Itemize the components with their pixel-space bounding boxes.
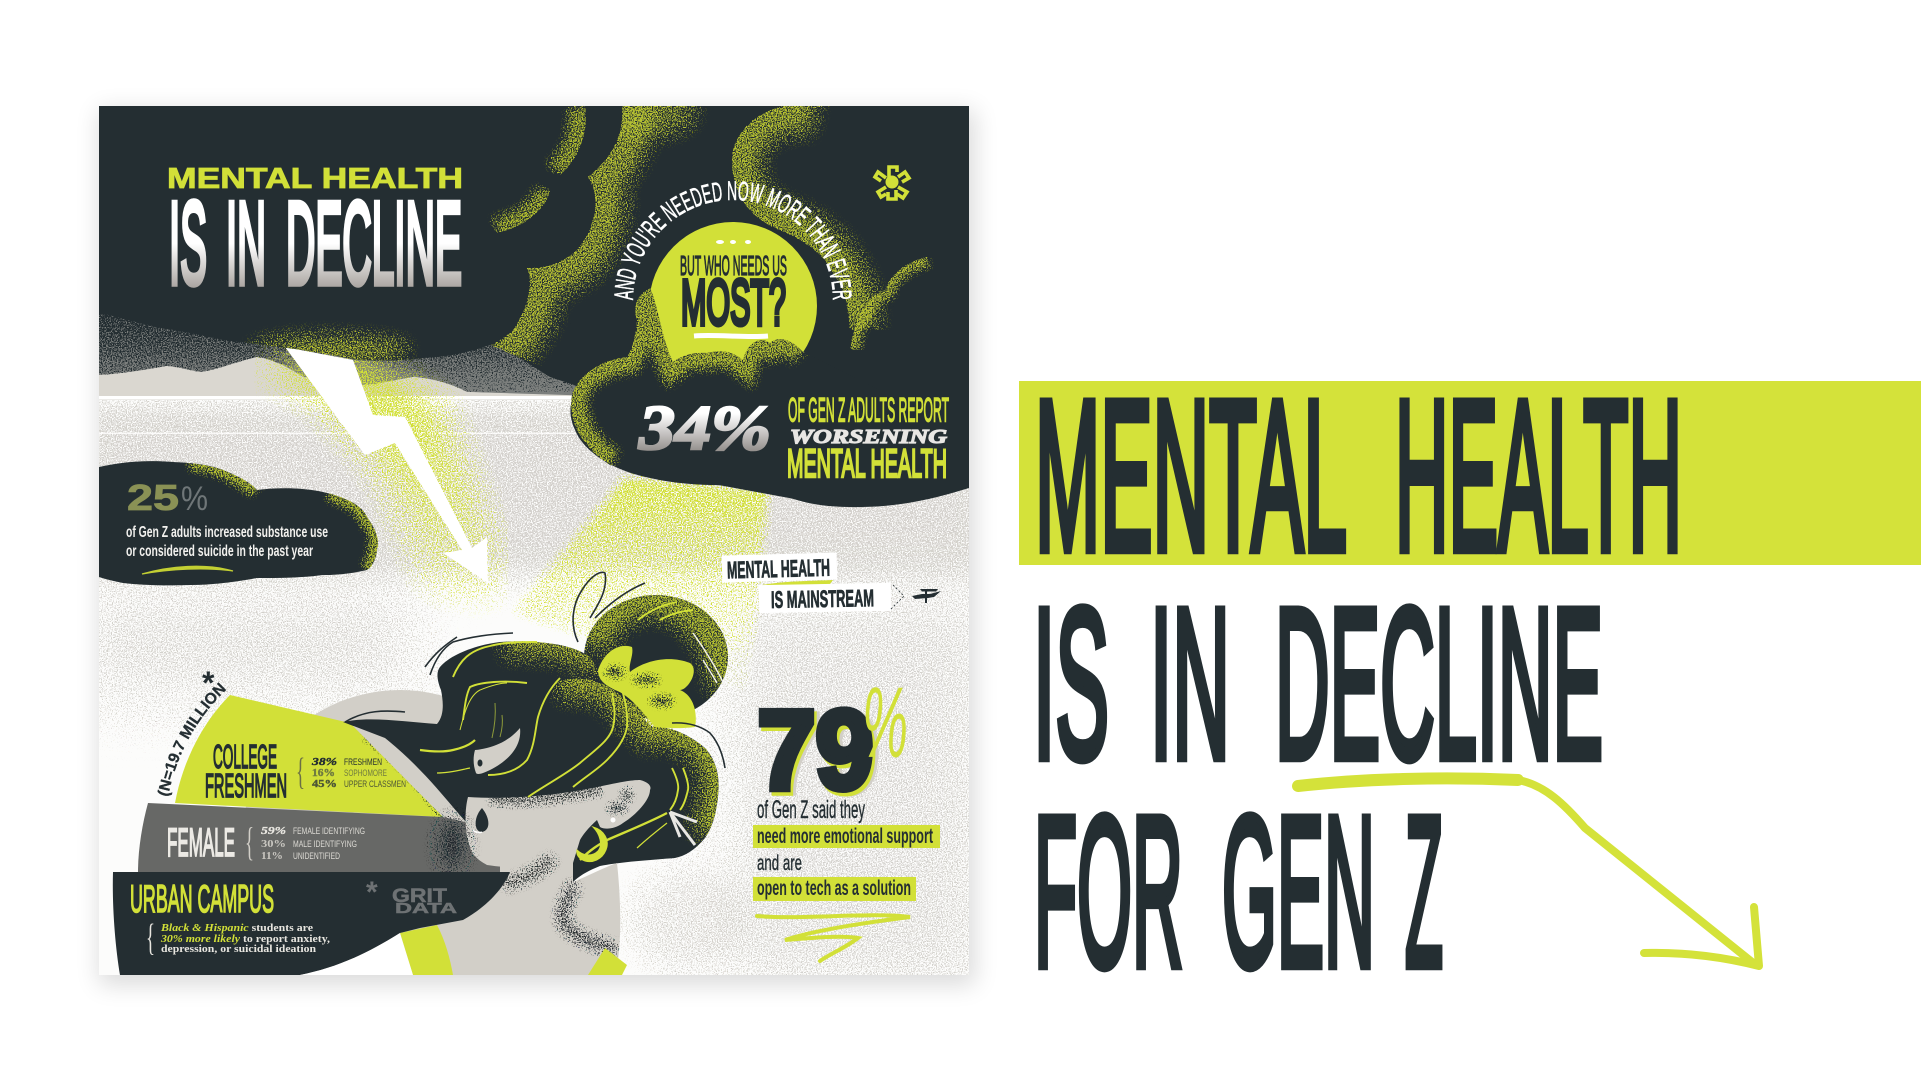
white arrow mark xyxy=(670,812,697,845)
banner line 1 xyxy=(722,553,837,585)
text 1: of Gen Z said they xyxy=(757,796,865,824)
caption line 2: or considered suicide in the past year xyxy=(126,543,313,560)
panel labels: female: MALE IDENTIFYING xyxy=(293,839,357,850)
sky grain background xyxy=(80,400,990,990)
highlight 1 xyxy=(753,825,940,848)
panel: infographic: DECLINE xyxy=(286,178,462,309)
beige backdrop circle xyxy=(240,690,560,1010)
grit data xyxy=(366,876,457,917)
figure yellow offset: 79 xyxy=(760,691,876,816)
urban campus band xyxy=(113,872,510,975)
hair strands xyxy=(420,602,693,860)
panel labels: college freshmen: COLLEGE xyxy=(213,738,277,775)
banner line 1: MENTAL HEALTH xyxy=(727,555,830,584)
panel: 25% cloud xyxy=(99,461,378,585)
storm cloud xyxy=(99,106,969,507)
beam of light xyxy=(514,478,768,690)
hair xyxy=(343,641,719,882)
body line 2: 30% more likely to report anxiety, xyxy=(160,934,331,945)
panel labels: college freshmen: FRESHMEN xyxy=(205,767,287,804)
clear area left of backdrop xyxy=(99,872,138,975)
stat: 79% xyxy=(753,667,940,961)
hair dissolving over wedge xyxy=(368,732,452,818)
segment: college freshmen wedge xyxy=(175,695,443,817)
lightning glow xyxy=(262,352,500,600)
body line 3: depression, or suicidal ideation xyxy=(161,944,317,955)
bow xyxy=(598,646,696,728)
white shoulder xyxy=(300,933,413,975)
heading line 2 xyxy=(1033,564,1603,804)
share 38%: 38% xyxy=(311,756,337,768)
panel: infographic xyxy=(99,106,969,975)
band below grey cloud xyxy=(99,357,600,400)
grey cloud grain xyxy=(99,313,576,392)
heading line 1: MENTAL xyxy=(1035,356,1347,596)
title line 2 xyxy=(172,198,462,288)
panel: infographic: BUT WHO NEEDS US xyxy=(680,250,787,281)
banner line 2: IS MAINSTREAM xyxy=(771,585,874,614)
panel labels: college freshmen xyxy=(205,738,406,804)
horizon band xyxy=(99,357,577,434)
text 2: and are xyxy=(757,852,802,875)
panel labels: college freshmen: { xyxy=(296,751,305,793)
share 30%: 30% xyxy=(261,838,286,850)
grit data: * xyxy=(366,876,378,909)
stat: 34% xyxy=(636,397,950,478)
figure 25%: 25 xyxy=(127,477,179,518)
share 59%: 59% xyxy=(261,825,286,837)
heading line 2: IN xyxy=(1150,564,1230,804)
panel labels: female: FEMALE IDENTIFYING xyxy=(293,826,365,837)
text: Z xyxy=(1405,772,1443,1012)
heading line 2: IS xyxy=(1033,564,1109,804)
heading band xyxy=(1019,381,1921,565)
panel labels: college freshmen: FRESHMEN xyxy=(344,757,382,768)
dots xyxy=(716,240,751,244)
highlight 2: open to tech as a solution xyxy=(757,877,911,900)
panel: urban campus: URBAN CAMPUS xyxy=(130,878,274,921)
banner underline xyxy=(762,580,833,589)
grit data: DATA xyxy=(395,900,457,917)
highlight 1: need more emotional support xyxy=(757,825,933,848)
title line 2: IN xyxy=(226,178,266,309)
panel shadow xyxy=(99,110,975,985)
icon: plane xyxy=(912,589,941,603)
tear xyxy=(473,808,488,833)
title line 2: IS xyxy=(169,178,207,309)
text: GEN xyxy=(1222,772,1375,1012)
banner line 2 xyxy=(759,583,891,614)
hand-drawn arrow xyxy=(1298,778,1759,966)
curved text: AND YOU'RE NEEDED NOW MORE THAN EVER xyxy=(614,181,852,300)
panel labels: female: FEMALE xyxy=(167,821,235,865)
straps xyxy=(400,925,627,975)
figure 34%: 34% xyxy=(638,392,771,463)
text: OF GEN Z ADULTS REPORT xyxy=(788,392,949,430)
circle: who needs us: MOST? xyxy=(681,266,786,338)
heading line 3: FOR xyxy=(1034,772,1183,1012)
front cloud rim light xyxy=(571,288,803,465)
stat: 34%: MENTAL HEALTH xyxy=(787,442,947,486)
share 11%: 11% xyxy=(261,850,283,862)
body line 1: Black & Hispanic students are xyxy=(160,923,314,934)
title block xyxy=(168,168,462,288)
panel: urban campus xyxy=(113,872,510,975)
scribble xyxy=(757,915,910,961)
panel: urban campus: { xyxy=(146,917,155,959)
banner: mental health is mainstream xyxy=(722,553,941,614)
caption line 2: WORSENING xyxy=(790,426,948,448)
highlight 2 xyxy=(753,877,916,901)
panel labels: college freshmen: SOPHOMORE xyxy=(344,768,387,779)
circle: who needs us xyxy=(650,222,817,362)
cloud rim light xyxy=(252,88,927,363)
panel labels: female: { xyxy=(245,819,254,864)
figure shadow: 79 xyxy=(763,691,879,816)
asterisk: * xyxy=(202,665,215,701)
stray hairs xyxy=(345,572,725,768)
hair rim light xyxy=(368,598,728,835)
grit data: GRIT xyxy=(392,886,447,907)
tow line xyxy=(890,585,904,610)
underline xyxy=(694,335,768,337)
earring xyxy=(577,827,607,862)
grey cloud layer xyxy=(99,313,576,400)
eye xyxy=(478,760,482,766)
percent sign: % xyxy=(862,667,908,779)
illustration: woman xyxy=(99,572,728,1010)
hair highlights xyxy=(693,633,725,687)
title line 1: MENTAL HEALTH xyxy=(167,163,463,195)
share 45%: 45% xyxy=(312,778,337,790)
sample size text: (N=19.7 MILLION) xyxy=(158,682,226,796)
panel labels: female: UNIDENTIFIED xyxy=(293,851,340,862)
percent sign: % xyxy=(181,480,208,518)
underline xyxy=(142,566,233,574)
skin shading xyxy=(439,789,632,950)
icon: logo xyxy=(875,167,909,199)
front cloud xyxy=(571,290,804,499)
segment: female band xyxy=(138,803,500,875)
cloud rim light xyxy=(190,461,378,570)
caption line 1: of Gen Z adults increased substance use xyxy=(126,524,328,541)
panel labels: college freshmen: UPPER CLASSMEN xyxy=(344,779,406,790)
ear highlight xyxy=(610,818,616,822)
hair bun xyxy=(584,595,728,719)
forehead gap xyxy=(474,728,520,774)
face and neck xyxy=(300,780,651,975)
lightning bolt xyxy=(285,347,488,583)
share 16%: 16% xyxy=(312,767,335,779)
figure 79: 79 xyxy=(758,688,874,812)
